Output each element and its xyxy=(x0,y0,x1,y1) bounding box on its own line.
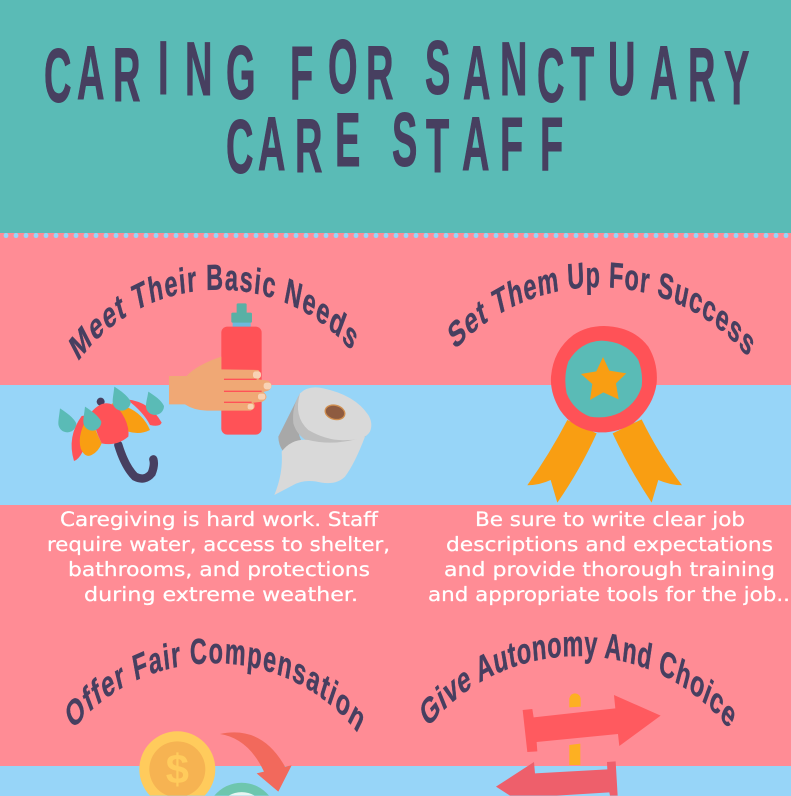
text: basic needs description xyxy=(47,508,390,606)
background: upper blue band xyxy=(0,385,791,505)
icon: umbrella in rain xyxy=(58,387,164,479)
icon: coins with arrow: $ xyxy=(166,745,189,792)
heading: set them up for success: Set Them Up For Success xyxy=(448,262,754,355)
text: success description: descriptions and expectations xyxy=(446,533,773,556)
text: success description: and appropriate tools for the job.. xyxy=(428,583,790,606)
icon: toilet paper roll xyxy=(274,387,371,495)
background: pink band xyxy=(0,233,791,796)
dotted divider xyxy=(0,233,791,238)
title: CARE STAFF xyxy=(226,98,563,189)
title xyxy=(44,25,749,189)
title: CARING FOR SANCTUARY xyxy=(44,25,749,120)
heading: meet their basic needs: Meet Their Basic Needs xyxy=(68,264,356,360)
text: success description: Be sure to write clear job xyxy=(475,508,745,531)
icon: award ribbon xyxy=(527,326,682,503)
heading: offer fair compensation: Offer Fair Compensation xyxy=(66,638,364,732)
icon: hand holding water bottle xyxy=(169,303,272,435)
text: success description xyxy=(428,508,790,606)
text: basic needs description: bathrooms, and protections xyxy=(68,558,370,581)
panel: set them up for success xyxy=(428,262,790,606)
panel: meet their basic needs xyxy=(47,264,390,606)
icon: direction signpost xyxy=(496,693,661,796)
background: lower blue band xyxy=(0,766,791,796)
text: success description: and provide thorough training xyxy=(444,558,775,581)
panel: offer fair compensation xyxy=(66,638,364,796)
heading: give autonomy and choice: Give Autonomy And Choice xyxy=(421,634,734,726)
text: basic needs description: Caregiving is hard work. Staff xyxy=(60,508,379,531)
text: basic needs description: during extreme weather. xyxy=(84,583,358,606)
background: teal header band xyxy=(0,0,791,233)
icon: coins with arrow xyxy=(139,731,292,796)
text: basic needs description: require water, access to shelter, xyxy=(47,533,390,556)
panel: give autonomy and choice xyxy=(421,634,734,796)
